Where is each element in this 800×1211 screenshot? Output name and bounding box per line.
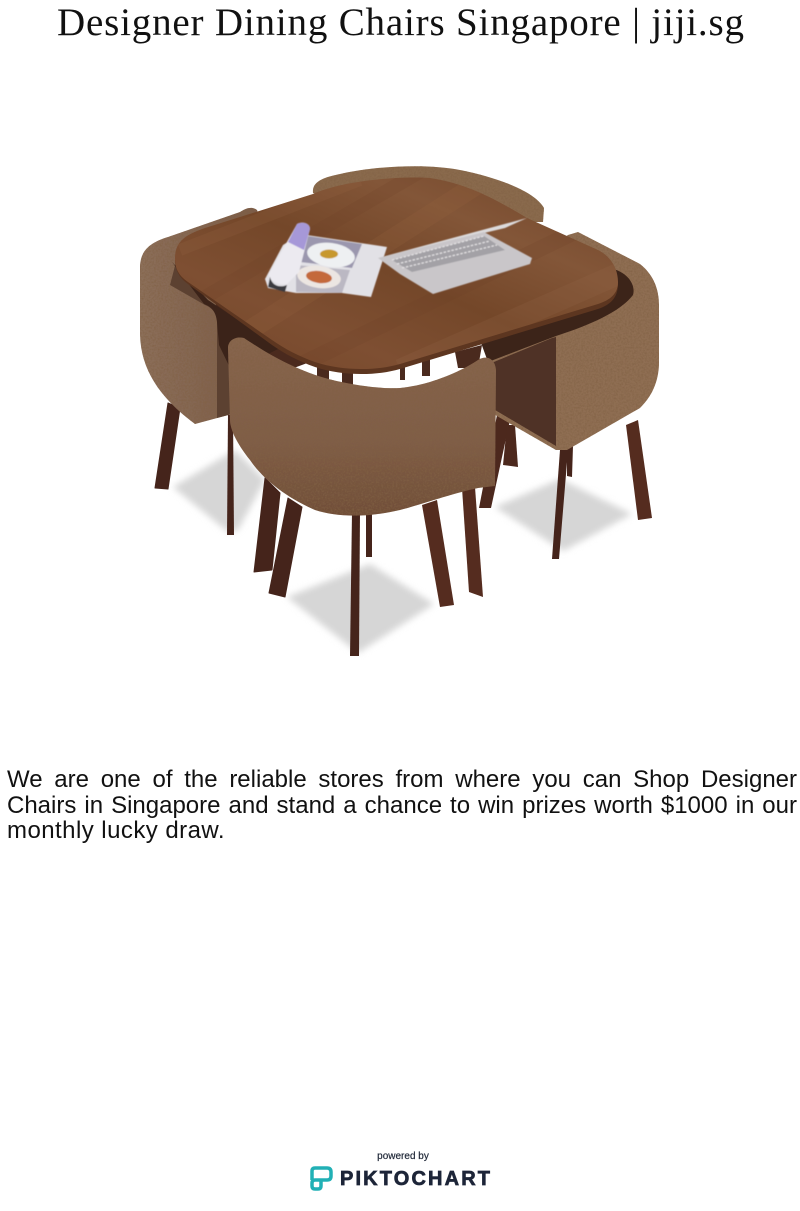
laptop on table [378,218,532,294]
left chair [140,208,280,424]
body text [7,766,797,844]
logo icon [312,1168,331,1189]
table base under the top [215,300,510,400]
body text: monthly lucky draw. [7,817,225,844]
powered by caption: powered by [377,1151,429,1162]
body text: Chairs in Singapore and stand a chance to win prizes worth $1000 in our [7,792,797,818]
front chair [228,337,496,516]
magazine on table [265,223,387,297]
back chair rim [313,166,544,222]
shadows [173,450,632,653]
powered by Piktochart logo [310,1151,490,1191]
title: Designer Dining Chairs Singapore | jiji.sg [57,1,744,44]
product photo: dining table with four chairs [140,166,659,656]
right chair [480,232,659,450]
body text: We are one of the reliable stores from where you can Shop Designer [7,766,797,793]
chair legs [155,403,652,656]
table top [175,178,618,374]
logo wordmark: PIKTOCHART [340,1168,490,1190]
